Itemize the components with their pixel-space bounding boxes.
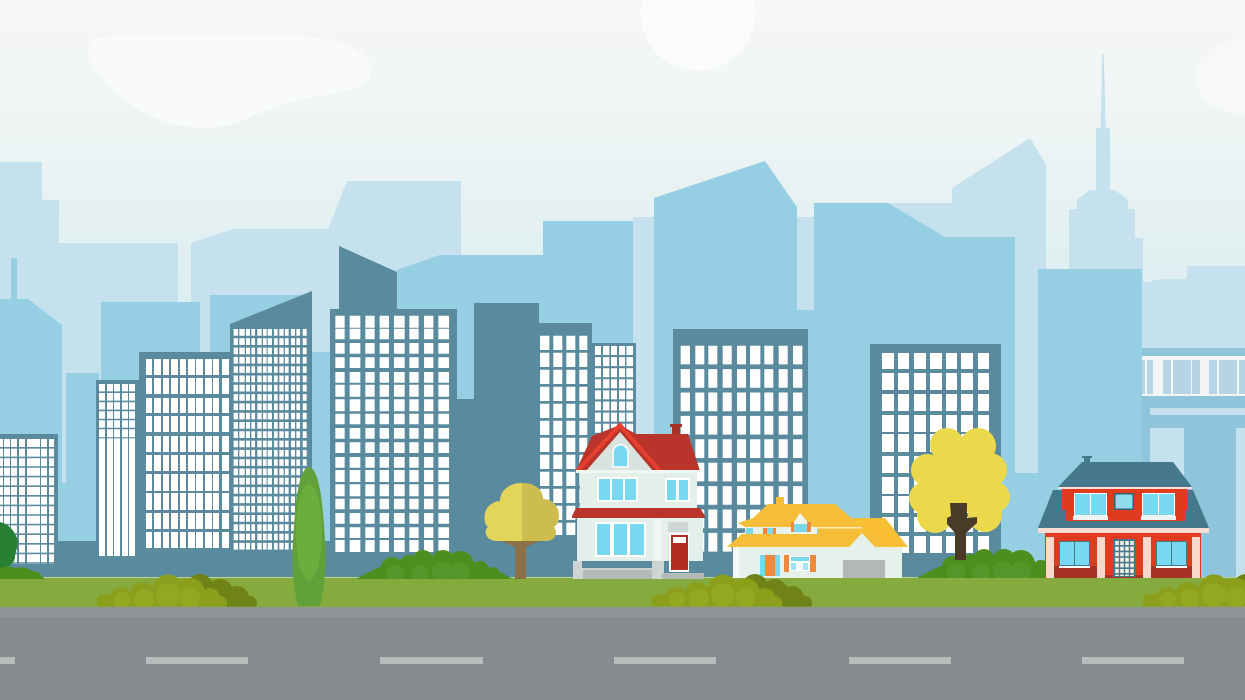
lower wall [1045,533,1201,578]
upper window right [665,478,690,502]
upper centre window [1114,493,1134,510]
upper window left [597,477,638,502]
upper wall [1062,487,1187,521]
sky background [0,0,1245,310]
side door [760,555,780,576]
transom [668,522,688,532]
lower window [595,522,646,557]
far skyline layer [0,54,1245,577]
bush: back centre [356,550,513,583]
upper walls [580,471,697,508]
tree: cypress [292,467,326,606]
dark red base [1054,566,1193,578]
gable trim [577,425,660,471]
tree: large yellow [909,428,1010,560]
dormer window [791,522,811,532]
house: white with red roof [572,424,705,579]
elevated bridge [1142,348,1245,578]
mid wall [745,527,817,535]
gable window [613,445,628,467]
bush: back left [0,566,45,579]
garage gable [849,533,875,547]
upper window right [1141,493,1176,520]
mid skyline layer [0,161,1142,577]
bush: back right [917,549,1074,582]
dark building mass [0,246,1001,577]
windows: building A [2,439,52,564]
dormer [787,513,817,533]
bush: front centre [652,574,812,610]
windows: building E [340,316,444,552]
garage door [843,560,885,578]
chimney [1082,456,1092,463]
chimney [670,424,682,437]
door steps [662,573,704,579]
windows: building H [685,346,798,553]
sun [641,0,755,71]
tree: small yellow [484,483,559,579]
cloud: right [1195,38,1245,115]
windows: building B [102,384,132,556]
lane markings [0,657,1184,664]
side roof [1038,490,1209,528]
windows: building C [149,359,226,548]
chimney [776,497,784,505]
walls [733,547,902,578]
wing roof [727,518,908,547]
door [669,533,689,572]
lower roof [727,528,885,547]
house: red with teal roof [1038,456,1209,578]
main roof [576,425,700,471]
porch post [733,547,739,578]
porch roof [572,508,705,518]
windows: building D [236,329,305,550]
tree: dark green at left edge [0,522,18,568]
door [1113,539,1135,577]
lower window left [1059,541,1090,568]
eave [576,470,700,473]
windows: building G [598,346,630,435]
top roof [1058,462,1192,487]
lower walls [577,517,703,561]
cloud: left [88,35,372,128]
lower window right [1156,541,1187,568]
upper roof [738,504,862,527]
window with shutters [784,555,816,572]
top eave [1058,487,1192,489]
windows: building I [888,353,984,553]
house: white with yellow roof [727,497,908,578]
upper window left [1073,493,1108,520]
gable [586,432,653,471]
upper wall trim [817,527,862,528]
road [0,617,1245,700]
steps [583,570,652,579]
columns [1046,537,1200,578]
grass [0,578,1245,607]
road kerb [0,607,1245,617]
porch column [654,518,662,560]
stone base [573,561,704,579]
bush: front right [1143,574,1245,610]
bush: front left [97,574,257,610]
eave [1038,528,1209,533]
windows: building F [545,336,583,535]
mid windows [746,528,776,534]
